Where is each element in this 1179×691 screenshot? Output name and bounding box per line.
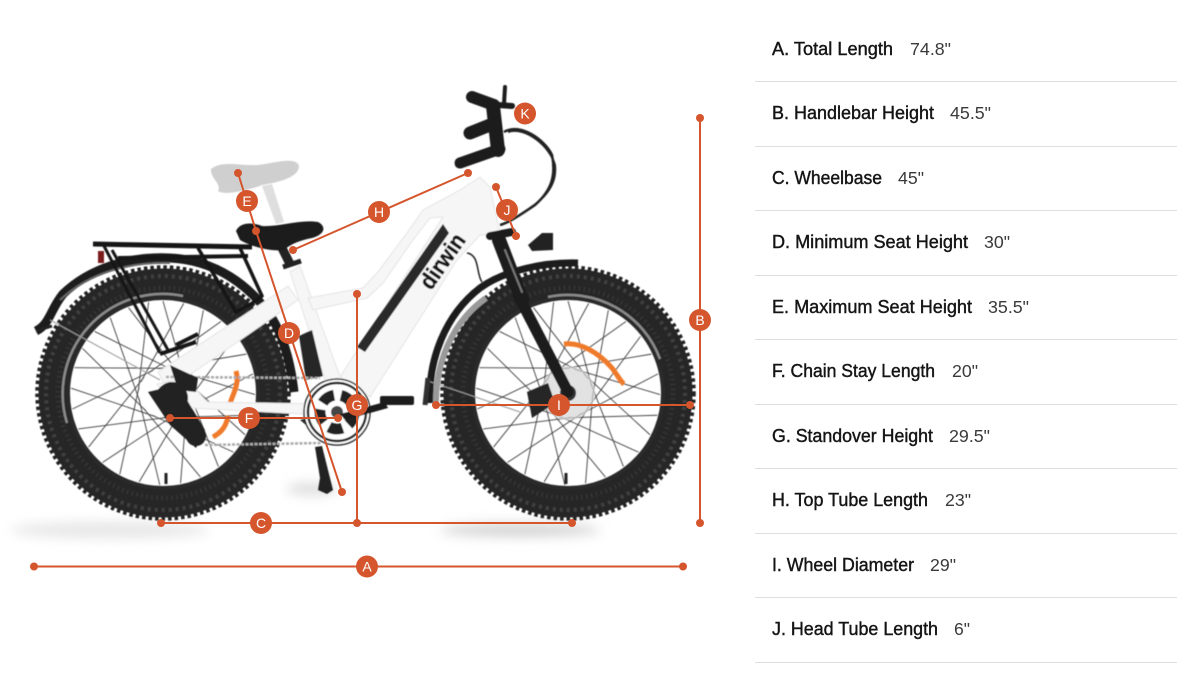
dimension F: chain stay length: F: [245, 410, 253, 426]
dimension C: wheelbase: [157, 512, 576, 534]
row I: 29": [930, 555, 956, 575]
stem and handlebars: [460, 87, 512, 163]
row J: 6": [954, 619, 970, 639]
row G: [755, 426, 1177, 468]
row E: E. Maximum Seat Height: [772, 297, 972, 317]
saddle: [236, 221, 323, 250]
row I: [755, 555, 1177, 598]
row H: [755, 490, 1177, 534]
fork: [490, 232, 568, 392]
dimension A: total length: A: [362, 558, 372, 574]
dimension G: standover height: G: [352, 397, 362, 413]
row I: I. Wheel Diameter: [772, 555, 914, 575]
dimension D: minimum seat height: D: [284, 325, 294, 341]
rear fender: [36, 258, 294, 392]
crank and pedal: [340, 396, 414, 420]
dimension G: standover height: [346, 290, 368, 527]
seat in raised position: [211, 161, 299, 224]
dimension F: chain stay length: [166, 407, 342, 429]
dimension B: handlebar height: [689, 114, 711, 527]
kickstand: [315, 446, 333, 494]
row A: [755, 39, 1177, 82]
row B: B. Handlebar Height: [772, 103, 934, 123]
row B: [755, 103, 1177, 146]
dimension J: head tube length: [492, 183, 520, 240]
row D: D. Minimum Seat Height: [772, 232, 968, 252]
row F: 20": [952, 361, 978, 381]
dimension C: wheelbase: C: [256, 515, 266, 531]
row F: F. Chain Stay Length: [772, 361, 935, 381]
valve stems: [166, 473, 566, 484]
brake and power cables: [467, 129, 555, 282]
dimension H: top tube length: H: [374, 204, 384, 220]
front fender: [425, 263, 578, 412]
dimension I: wheel diameter: [432, 394, 694, 416]
cassette and derailleur: [148, 365, 206, 448]
bicycle illustration: [36, 87, 694, 518]
dimension H: top tube length: [289, 169, 472, 254]
orange reflectors: [213, 344, 624, 437]
chainring: [304, 379, 370, 445]
rear rack: [93, 244, 262, 354]
rear light: [98, 251, 104, 263]
dimension D: minimum seat height: [252, 227, 346, 496]
row G: G. Standover Height: [772, 426, 933, 446]
battery strip: [357, 224, 449, 352]
ground shadows: [10, 484, 600, 538]
row C: C. Wheelbase: [772, 168, 882, 188]
motor housing: [300, 415, 345, 445]
frame: [157, 177, 500, 417]
dimension K: handlebar marker: K: [520, 106, 530, 122]
row H: 23": [945, 490, 971, 510]
specification list: [755, 39, 1177, 662]
disc brake: [527, 383, 555, 418]
row C: 45": [898, 168, 924, 188]
front wheel: [442, 268, 694, 518]
row F: [755, 361, 1177, 404]
seat post: [282, 248, 290, 264]
row G: 29.5": [949, 426, 990, 446]
row C: [755, 168, 1177, 210]
row A: 74.8": [910, 39, 951, 59]
row B: 45.5": [950, 103, 991, 123]
brand text: dirwin: [414, 228, 471, 294]
dimension A: total length: [30, 556, 687, 578]
row E: [755, 297, 1177, 340]
dimension K: handlebar marker: [514, 102, 536, 124]
headlight: [528, 233, 553, 251]
seat post clamp: [283, 261, 301, 267]
dimension B: handlebar height: B: [695, 312, 705, 328]
row J: [755, 619, 1177, 662]
row A: A. Total Length: [772, 39, 893, 59]
dimension J: head tube length: J: [504, 202, 510, 218]
row E: 35.5": [988, 297, 1029, 317]
row H: H. Top Tube Length: [772, 490, 928, 510]
row D: 30": [984, 232, 1010, 252]
dimension E: maximum seat height: [234, 169, 258, 231]
rear wheel: [38, 268, 288, 518]
dimension I: wheel diameter: I: [557, 397, 561, 413]
dimension E: maximum seat height: E: [242, 193, 252, 209]
chain: [166, 377, 322, 445]
controller box: [299, 330, 323, 380]
row D: [755, 232, 1177, 276]
row J: J. Head Tube Length: [772, 619, 938, 639]
